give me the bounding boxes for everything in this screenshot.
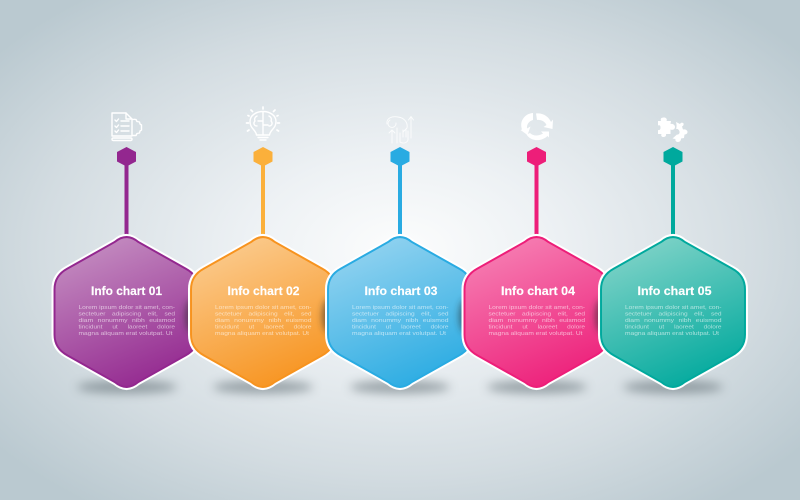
text block: diam nonummy nibh euismod xyxy=(352,318,448,324)
icon: recycle arrows xyxy=(520,113,553,140)
hexagon card xyxy=(190,236,336,388)
heading: Info chart 02 xyxy=(228,286,300,298)
text block: diam nonummy nibh euismod xyxy=(625,318,722,324)
text block: sectetuer adipiscing elit, sed xyxy=(78,312,175,318)
text block xyxy=(488,305,585,337)
ground shadows xyxy=(77,380,723,394)
text block: diam nonummy nibh euismod xyxy=(488,318,585,324)
connector line xyxy=(671,160,675,236)
text block: Lorem ipsum dolor sit amet, con- xyxy=(215,305,312,311)
connector line xyxy=(261,160,265,236)
text block: tincidunt ut laoreet dolore xyxy=(215,324,312,330)
icon: checklist with gear xyxy=(112,113,142,140)
heading: Info chart 03 xyxy=(364,286,438,298)
heading: Info chart 01 xyxy=(91,286,163,298)
panel: info chart 01 xyxy=(54,113,200,388)
cast shadow on card 02 xyxy=(322,299,336,333)
icon: light bulb with brain xyxy=(246,107,280,140)
text block: Lorem ipsum dolor sit amet, con- xyxy=(625,305,722,311)
heading: Info chart 04 xyxy=(501,286,576,298)
text block: diam nonummy nibh euismod xyxy=(215,318,312,324)
panel: info chart 05 xyxy=(600,118,746,388)
cast shadow on card 04 xyxy=(595,299,609,333)
cast shadow on card 03 xyxy=(459,299,473,333)
marker hexagon xyxy=(664,147,682,166)
text block: tincidunt ut laoreet dolore xyxy=(488,324,585,330)
text block: sectetuer adipiscing elit, sed xyxy=(488,312,585,318)
text block: magna aliquam erat volutpat. Ut xyxy=(352,331,447,337)
text block: magna aliquam erat volutpat. Ut xyxy=(215,331,310,337)
text block: Lorem ipsum dolor sit amet, con- xyxy=(78,305,175,311)
text block: tincidunt ut laoreet dolore xyxy=(78,324,175,330)
marker hexagon xyxy=(390,147,410,166)
connector line xyxy=(398,160,402,236)
marker hexagon xyxy=(117,147,136,166)
marker hexagon xyxy=(527,147,546,166)
text block: diam nonummy nibh euismod xyxy=(78,318,175,324)
cast shadow on card 01 xyxy=(185,299,199,333)
panel: info chart 03 xyxy=(327,116,473,388)
heading: Info chart 05 xyxy=(638,286,712,298)
hexagon card xyxy=(600,236,746,388)
text block: tincidunt ut laoreet dolore xyxy=(625,324,722,330)
panel: info chart 02 xyxy=(190,107,336,388)
connector line xyxy=(124,160,128,236)
text block: sectetuer adipiscing elit, sed xyxy=(625,312,722,318)
icon: puzzle pieces xyxy=(658,118,688,142)
text block: magna aliquam erat volutpat. Ut xyxy=(488,331,583,337)
marker hexagon xyxy=(254,147,272,166)
text block: sectetuer adipiscing elit, sed xyxy=(215,312,312,318)
text block: sectetuer adipiscing elit, sed xyxy=(352,312,448,318)
hexagon card xyxy=(327,236,473,388)
icon: head with growth arrows xyxy=(387,116,414,143)
text block: Lorem ipsum dolor sit amet, con- xyxy=(488,305,585,311)
text block xyxy=(352,305,449,337)
connector line xyxy=(534,160,538,236)
hexagon card xyxy=(54,236,200,388)
text block: tincidunt ut laoreet dolore xyxy=(352,324,448,330)
text block xyxy=(625,305,722,337)
text block xyxy=(78,305,175,337)
text block: magna aliquam erat volutpat. Ut xyxy=(625,331,720,337)
panel: info chart 04 xyxy=(464,113,610,388)
hexagon card xyxy=(464,236,610,388)
text block: magna aliquam erat volutpat. Ut xyxy=(78,331,173,337)
text block: Lorem ipsum dolor sit amet, con- xyxy=(352,305,449,311)
text block xyxy=(215,305,312,337)
